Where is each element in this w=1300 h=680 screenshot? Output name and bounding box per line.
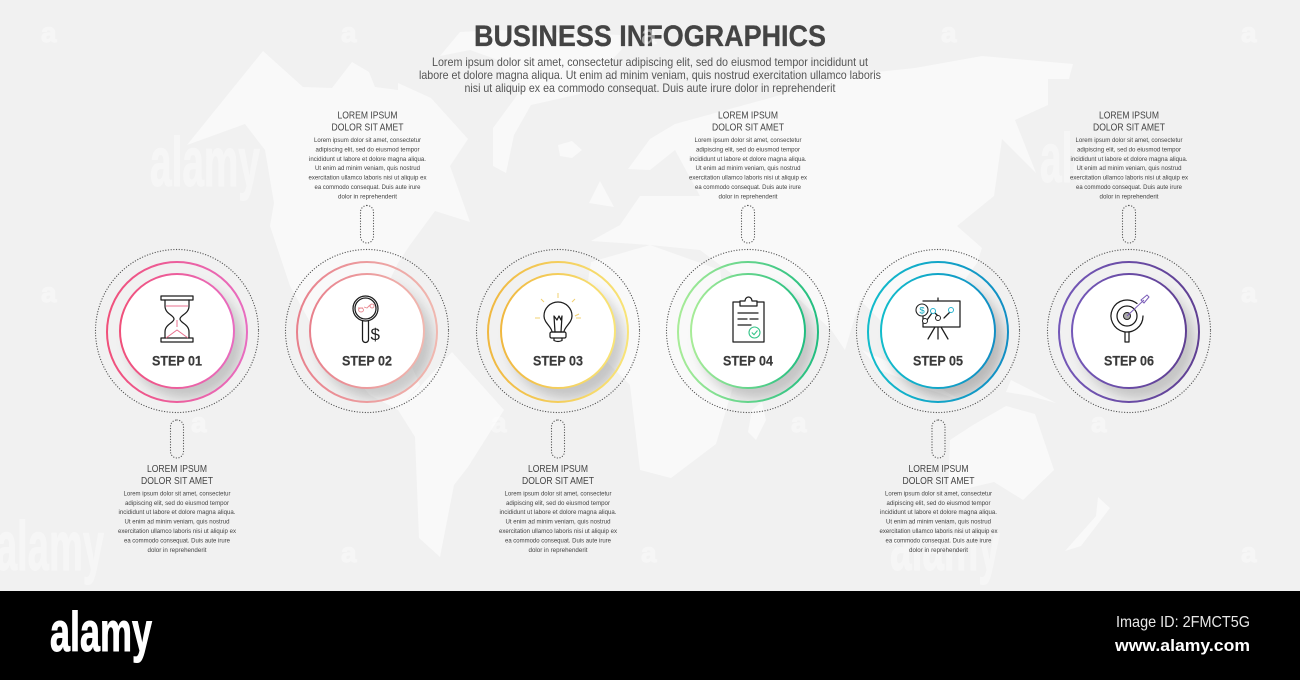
text block: step 06 bbox=[1070, 110, 1189, 200]
icon: target with arrow bbox=[1111, 295, 1149, 342]
watermark: a bbox=[641, 537, 657, 568]
text block: step 06: LOREM IPSUM bbox=[1099, 110, 1159, 122]
text block: step 04: ea commodo consequat. Duis aute irure bbox=[695, 184, 801, 191]
step 06 bbox=[1048, 250, 1210, 412]
watermark: a bbox=[941, 17, 957, 48]
label: step 03: STEP 03 bbox=[533, 354, 583, 368]
text block: step 03: ea commodo consequat. Duis aute irure bbox=[505, 537, 611, 544]
icon: hourglass bbox=[161, 296, 193, 342]
text block: step 03: LOREM IPSUM bbox=[528, 463, 588, 475]
text block: step 06: exercitation ullamco laboris nisi ut aliquip ex bbox=[1070, 175, 1189, 182]
text block: step 01 bbox=[118, 463, 237, 554]
step 03 bbox=[476, 250, 640, 412]
text block: step 05: DOLOR SIT AMET bbox=[902, 475, 975, 487]
text block: step 02: DOLOR SIT AMET bbox=[332, 122, 404, 134]
text block: step 04: exercitation ullamco laboris nisi ut aliquip ex bbox=[689, 175, 808, 182]
icon: light bulb bbox=[535, 293, 581, 342]
text block: step 05: exercitation ullamco laboris nisi ut aliquip ex bbox=[880, 528, 998, 535]
text block: step 04: LOREM IPSUM bbox=[718, 110, 778, 122]
text block: step 04: adipiscing elit, sed do eiusmod tempor bbox=[696, 146, 801, 153]
icon: magnifier and dollar: $ bbox=[370, 325, 380, 344]
text block: step 01: incididunt ut labore et dolore magna aliqua. bbox=[118, 509, 236, 516]
watermark: alamy bbox=[150, 123, 260, 201]
watermark: a bbox=[791, 407, 807, 438]
text block: step 02: Ut enim ad minim veniam, quis nostrud bbox=[315, 165, 420, 172]
text block: step 02: dolor in reprehenderit bbox=[338, 193, 397, 200]
connector: step 06 bbox=[1122, 206, 1136, 243]
intro text: Lorem ipsum dolor sit amet, consectetur adipiscing elit, sed do eiusmod tempor incididunt ut bbox=[432, 55, 869, 69]
step 02 bbox=[286, 250, 448, 412]
watermark: a bbox=[191, 407, 207, 438]
text block: step 03: dolor in reprehenderit bbox=[528, 547, 588, 554]
text block: step 02: exercitation ullamco laboris nisi ut aliquip ex bbox=[308, 175, 427, 182]
text block: step 02: ea commodo consequat. Duis aute irure bbox=[314, 184, 421, 191]
text block: step 01: Lorem ipsum dolor sit amet, consectetur bbox=[124, 490, 231, 497]
text block: step 06: DOLOR SIT AMET bbox=[1093, 122, 1165, 134]
intro text bbox=[419, 55, 881, 95]
text block: step 05: adipiscing elit, sed do eiusmod tempor bbox=[886, 500, 991, 507]
text block: step 01: dolor in reprehenderit bbox=[148, 547, 207, 554]
text block: step 05: ea commodo consequat. Duis aute irure bbox=[886, 537, 992, 544]
world map bbox=[187, 30, 1110, 557]
text block: step 02 bbox=[308, 110, 427, 200]
icon: clipboard bbox=[733, 297, 764, 342]
text block: step 06: incididunt ut labore et dolore magna aliqua. bbox=[1070, 156, 1188, 163]
connector: step 03 bbox=[552, 420, 564, 458]
text block: step 03: adipiscing elit, sed do eiusmod tempor bbox=[506, 500, 611, 507]
connector: step 04 bbox=[742, 206, 754, 243]
text block: step 04: dolor in reprehenderit bbox=[718, 193, 778, 200]
connector: step 01 bbox=[170, 420, 184, 458]
icon: presentation chart: $ bbox=[919, 306, 925, 316]
text block: step 02: adipiscing elit, sed do eiusmod tempor bbox=[316, 146, 420, 153]
text block: step 06: adipiscing elit, sed do eiusmod tempor bbox=[1077, 146, 1182, 153]
text block: step 01: DOLOR SIT AMET bbox=[141, 475, 213, 487]
watermark: alamy bbox=[890, 507, 1000, 585]
text block: step 05: dolor in reprehenderit bbox=[909, 547, 968, 554]
text block: step 02: incididunt ut labore et dolore magna aliqua. bbox=[309, 156, 426, 163]
footer logo: alamy bbox=[50, 600, 152, 663]
intro text: labore et dolore magna aliqua. Ut enim ad minim veniam, quis nostrud exercitation ullamco laboris bbox=[419, 68, 881, 82]
text block: step 01: adipiscing elit, sed do eiusmod tempor bbox=[125, 500, 230, 507]
label: step 06: STEP 06 bbox=[1104, 354, 1154, 368]
text block: step 01: exercitation ullamco laboris nisi ut aliquip ex bbox=[118, 528, 237, 535]
text block: step 03 bbox=[499, 463, 618, 554]
label: step 01: STEP 01 bbox=[152, 354, 202, 368]
text block: step 02: Lorem ipsum dolor sit amet, consectetur bbox=[314, 137, 422, 144]
text block: step 03: Lorem ipsum dolor sit amet, consectetur bbox=[504, 490, 612, 497]
watermark: a bbox=[1241, 537, 1257, 568]
watermark: a bbox=[41, 277, 57, 308]
text block: step 05: incididunt ut labore et dolore magna aliqua. bbox=[880, 509, 997, 516]
text block: step 03: incididunt ut labore et dolore magna aliqua. bbox=[500, 509, 617, 516]
footer bar bbox=[0, 591, 1300, 680]
step 04 bbox=[666, 250, 830, 412]
text block: step 03: DOLOR SIT AMET bbox=[522, 475, 594, 487]
label: step 04: STEP 04 bbox=[723, 354, 773, 368]
text block: step 06: Lorem ipsum dolor sit amet, consectetur bbox=[1076, 137, 1183, 144]
text block: step 05: LOREM IPSUM bbox=[908, 463, 968, 475]
label: step 02: STEP 02 bbox=[342, 354, 392, 368]
text block: step 04: DOLOR SIT AMET bbox=[712, 122, 784, 134]
step 01 bbox=[96, 250, 258, 412]
text block: step 03: Ut enim ad minim veniam, quis nostrud bbox=[506, 519, 611, 526]
text block: step 04: Ut enim ad minim veniam, quis nostrud bbox=[696, 165, 801, 172]
watermark over title: a bbox=[641, 19, 657, 50]
text block: step 02: LOREM IPSUM bbox=[338, 110, 398, 122]
text block: step 04 bbox=[689, 110, 808, 200]
watermark: a bbox=[341, 17, 357, 48]
connector: step 02 bbox=[360, 206, 374, 243]
intro text: nisi ut aliquip ex ea commodo consequat. Duis aute irure dolor in reprehenderit bbox=[464, 81, 836, 95]
text block: step 01: LOREM IPSUM bbox=[147, 463, 207, 475]
watermark: a bbox=[491, 407, 507, 438]
text block: step 01: ea commodo consequat. Duis aute irure bbox=[124, 537, 230, 544]
watermark: a bbox=[1241, 17, 1257, 48]
watermark: alamy bbox=[1040, 119, 1150, 197]
title: BUSINESS INFOGRAPHICS bbox=[474, 20, 826, 53]
text block: step 05: Ut enim ad minim veniam, quis nostrud bbox=[886, 519, 991, 526]
text block: step 05: Lorem ipsum dolor sit amet, consectetur bbox=[885, 490, 993, 497]
text block: step 05 bbox=[880, 463, 998, 554]
label: step 05: STEP 05 bbox=[913, 354, 963, 368]
icon: presentation chart bbox=[916, 298, 960, 339]
watermark: alamy bbox=[0, 507, 104, 585]
watermark: a bbox=[341, 537, 357, 568]
text block: step 06: ea commodo consequat. Duis aute irure bbox=[1076, 184, 1182, 191]
watermark: a bbox=[41, 17, 57, 48]
text block: step 06: dolor in reprehenderit bbox=[1100, 193, 1159, 200]
website: www.alamy.com bbox=[1114, 636, 1250, 655]
watermark: a bbox=[1091, 407, 1107, 438]
text block: step 03: exercitation ullamco laboris nisi ut aliquip ex bbox=[499, 528, 618, 535]
watermark: a bbox=[1241, 277, 1257, 308]
step 05 bbox=[856, 250, 1020, 412]
text block: step 01: Ut enim ad minim veniam, quis nostrud bbox=[124, 519, 230, 526]
connector: step 05 bbox=[932, 420, 945, 458]
image id: Image ID: 2FMCT5G bbox=[1116, 614, 1250, 631]
icon: magnifier and dollar bbox=[353, 296, 380, 344]
text block: step 04: incididunt ut labore et dolore magna aliqua. bbox=[690, 156, 807, 163]
text block: step 06: Ut enim ad minim veniam, quis nostrud bbox=[1076, 165, 1182, 172]
text block: step 04: Lorem ipsum dolor sit amet, consectetur bbox=[694, 137, 802, 144]
